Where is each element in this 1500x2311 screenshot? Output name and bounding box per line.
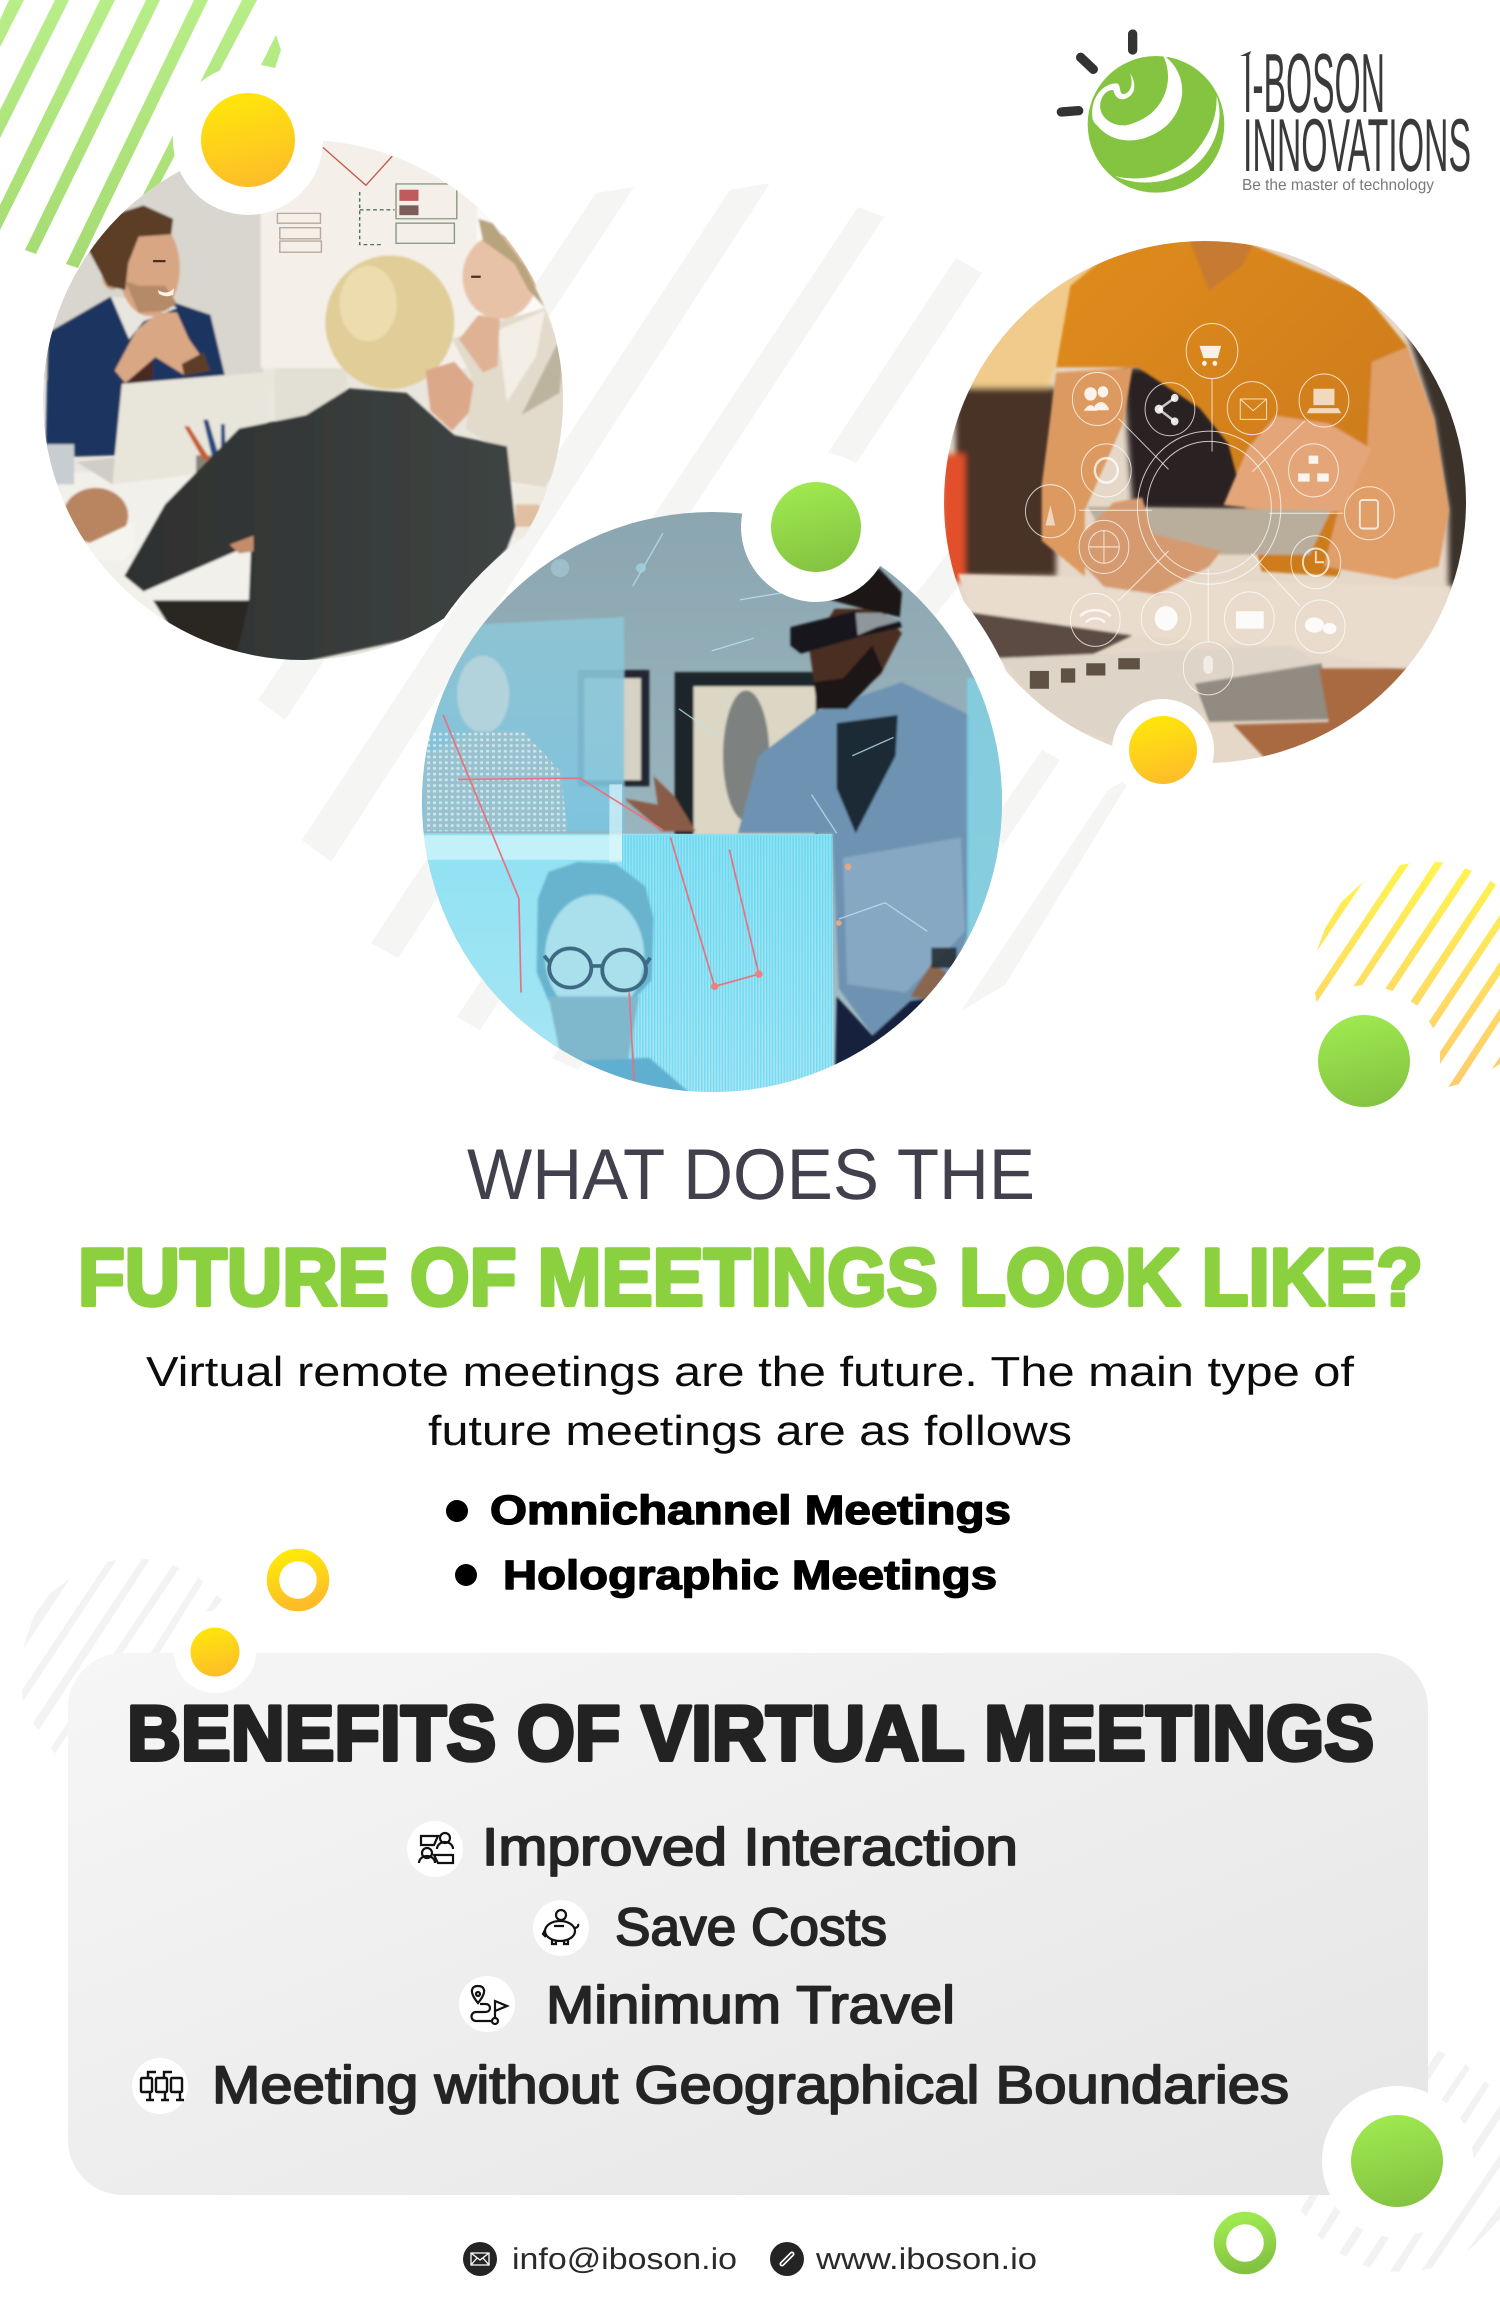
decoration: big green dot on panel corner — [1322, 2086, 1472, 2236]
title: what does the future of meetings look like: WHAT DOES THE — [467, 1135, 1035, 1215]
photo: business meeting around a table — [38, 134, 577, 670]
decoration: grey stripes lower left — [22, 1559, 222, 1753]
benefit: meeting without geographical boundaries: Meeting without Geographical Boundaries — [212, 2056, 1289, 2115]
background: grey diagonal stripes behind photos — [258, 183, 1133, 1070]
title: what does the future of meetings look like: FUTURE OF MEETINGS LOOK LIKE? — [78, 1233, 1423, 1323]
decoration: green ring — [1220, 2218, 1270, 2268]
heading: benefits: BENEFITS OF VIRTUAL MEETINGS — [127, 1689, 1374, 1777]
decoration: white halo and yellow dot on meeting photo — [173, 65, 323, 215]
intro paragraph — [146, 1348, 1354, 1454]
decoration: green stripes top-left — [0, 0, 281, 268]
decoration: grey stripes lower right — [1301, 2051, 1500, 2272]
bullet list: meeting types: Omnichannel Meetings — [490, 1487, 1011, 1533]
logo wordmark: Be the master of technology — [1242, 177, 1434, 194]
decoration: green dot on right — [1318, 1015, 1410, 1107]
logo: i-Boson Innovations — [1061, 34, 1471, 194]
panel: benefits of virtual meetings — [68, 1653, 1428, 2195]
footer: contact details — [463, 2242, 1037, 2276]
decoration: white halo and yellow dot on tablet photo — [1112, 699, 1214, 801]
photo: woman using tablet with digital icons — [941, 235, 1472, 776]
intro paragraph: Virtual remote meetings are the future. The main type of — [146, 1348, 1354, 1395]
email address: info@iboson.io — [512, 2243, 737, 2276]
benefit: improved interaction: Improved Interaction — [482, 1818, 1018, 1877]
logo mark: green swirl ball with rays — [1061, 34, 1224, 193]
logo wordmark — [1240, 36, 1471, 194]
benefit: minimum travel: Minimum Travel — [546, 1976, 955, 2035]
icon: link — [770, 2242, 804, 2276]
decoration: small yellow dot on panel corner — [174, 1611, 256, 1693]
icon: mail — [463, 2242, 497, 2276]
decoration: white halo and green dot on VR photo — [741, 452, 891, 602]
title: what does the future of meetings look like — [78, 1135, 1423, 1323]
intro paragraph: future meetings are as follows — [428, 1407, 1072, 1454]
bullet list: meeting types: Holographic Meetings — [503, 1552, 997, 1598]
decoration: yellow stripes on right — [1315, 862, 1500, 1087]
bullet list: meeting types — [446, 1487, 1011, 1598]
photo: virtual reality holographic meeting — [414, 507, 1011, 1103]
website address: www.iboson.io — [815, 2243, 1037, 2276]
benefit: save costs: Save Costs — [615, 1898, 887, 1957]
decoration: yellow ring — [273, 1555, 323, 1605]
